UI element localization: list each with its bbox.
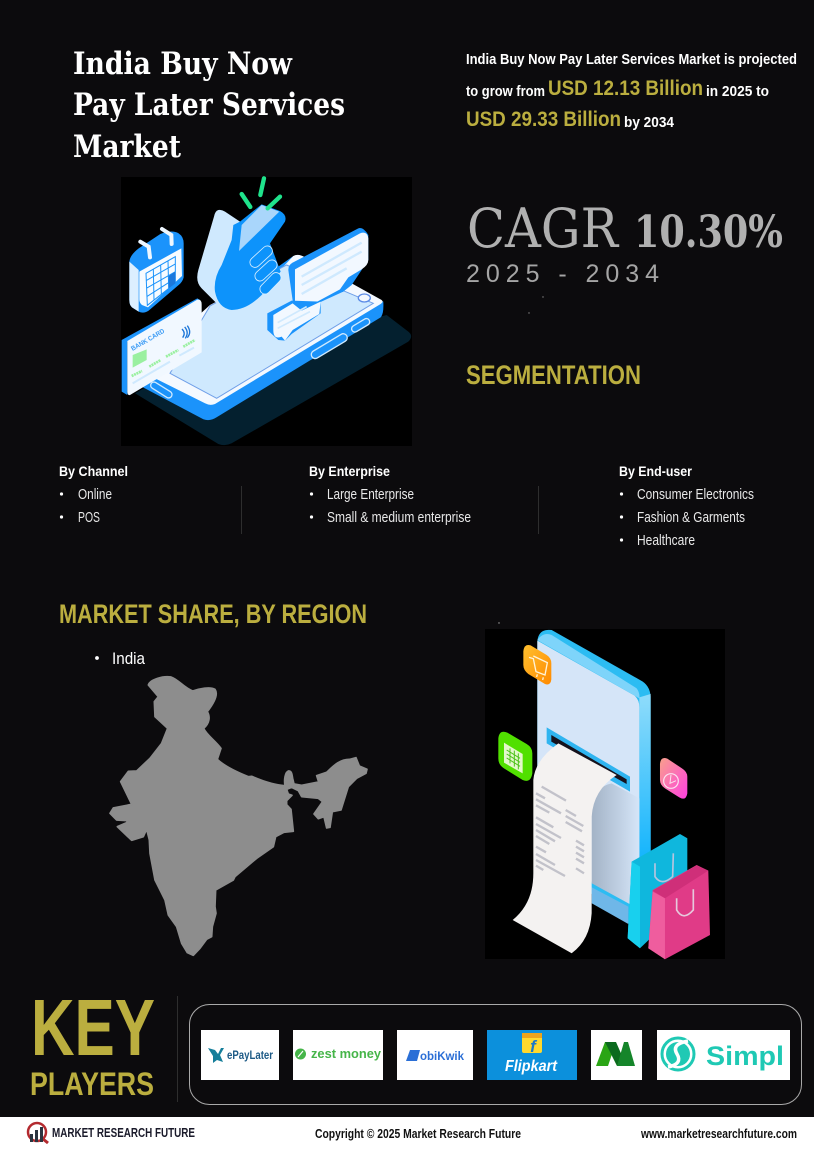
segmentation heading: SEGMENTATION xyxy=(466,360,641,390)
title: India Buy Now xyxy=(73,46,293,82)
CAGR figure: 10.30% xyxy=(634,207,783,258)
segment list: by end-user: By End-user xyxy=(619,463,692,479)
segment list: by end-user: Fashion & Garments xyxy=(637,510,745,526)
logo: ePayLater: ePayLater xyxy=(227,1048,273,1062)
market projection text xyxy=(466,52,797,131)
title xyxy=(73,46,345,165)
footer: Copyright © 2025 Market Research Future xyxy=(315,1127,521,1141)
blue shopping bag xyxy=(628,834,687,948)
segment list: by channel: By Channel xyxy=(59,463,128,479)
segment list: by enterprise: Large Enterprise xyxy=(327,487,414,503)
phone body xyxy=(137,256,383,420)
receipt slot xyxy=(547,727,630,792)
key players heading: KEY xyxy=(31,983,155,1072)
bank card: BANK CARD xyxy=(130,328,166,353)
illustration: phone with hand and bank card xyxy=(121,177,412,446)
logo: Flipkart: f xyxy=(530,1037,538,1056)
map: India xyxy=(110,677,367,955)
calendar xyxy=(129,229,184,313)
market projection text: USD 12.13 Billion xyxy=(548,76,703,100)
segment list: by channel xyxy=(59,463,128,526)
title: Market xyxy=(73,129,182,165)
illustration: phone printing receipt with shopping bags xyxy=(485,629,725,959)
logo: Simpl: Simpl xyxy=(706,1041,784,1071)
logo: Flipkart: Flipkart xyxy=(505,1058,558,1075)
segment list: by enterprise xyxy=(309,463,471,526)
footer: MARKET RESEARCH FUTURE xyxy=(52,1126,195,1140)
phone xyxy=(537,630,651,927)
key players panel xyxy=(190,1004,802,1104)
logo: MobiKwik xyxy=(397,1030,473,1080)
title: Pay Later Services xyxy=(73,87,345,123)
logo: Simpl xyxy=(657,1030,790,1080)
CAGR figure xyxy=(466,197,783,288)
logo: zest money xyxy=(293,1030,383,1080)
market share heading: MARKET SHARE, BY REGION xyxy=(59,599,367,629)
bank card xyxy=(122,298,202,395)
hand xyxy=(197,178,286,310)
segment list: by enterprise: By Enterprise xyxy=(309,463,390,479)
market projection text: to grow from xyxy=(466,84,545,100)
logo: MobiKwik: obiKwik xyxy=(420,1051,465,1063)
CAGR figure: 2025 - 2034 xyxy=(466,260,659,288)
logo: zest money: zest money xyxy=(311,1046,382,1061)
segment list: by end-user xyxy=(619,463,754,549)
small speech bubble xyxy=(267,301,321,341)
region label: India xyxy=(112,650,146,668)
receipt shadow xyxy=(592,783,639,909)
pink shopping bag xyxy=(648,865,710,959)
segment list: by end-user: Consumer Electronics xyxy=(637,487,754,503)
logo: green M xyxy=(591,1030,642,1080)
region label xyxy=(95,650,146,668)
CAGR figure: CAGR xyxy=(467,197,619,260)
icon: clock xyxy=(660,758,687,799)
market projection text: by 2034 xyxy=(624,115,675,131)
icon: cart xyxy=(523,645,551,684)
footer xyxy=(0,1117,814,1150)
logo: ePayLater xyxy=(201,1030,279,1080)
segment list: by channel: Online xyxy=(78,487,112,503)
key players heading xyxy=(30,983,155,1102)
icon: calendar xyxy=(498,732,532,781)
receipt paper xyxy=(513,743,617,953)
shadow xyxy=(135,315,411,445)
big speech bubble xyxy=(288,228,368,311)
segment list: by channel: POS xyxy=(78,510,100,526)
market projection text: USD 29.33 Billion xyxy=(466,107,621,131)
icon: brand logo xyxy=(28,1123,48,1143)
key players heading: PLAYERS xyxy=(30,1066,154,1102)
logo: Flipkart xyxy=(487,1030,577,1080)
phone buttons xyxy=(310,332,349,360)
segment list: by end-user: Healthcare xyxy=(637,533,695,549)
segment list: by enterprise: Small & medium enterprise xyxy=(327,510,471,526)
market projection text: in 2025 to xyxy=(706,84,769,100)
sparkle marks xyxy=(242,178,280,208)
